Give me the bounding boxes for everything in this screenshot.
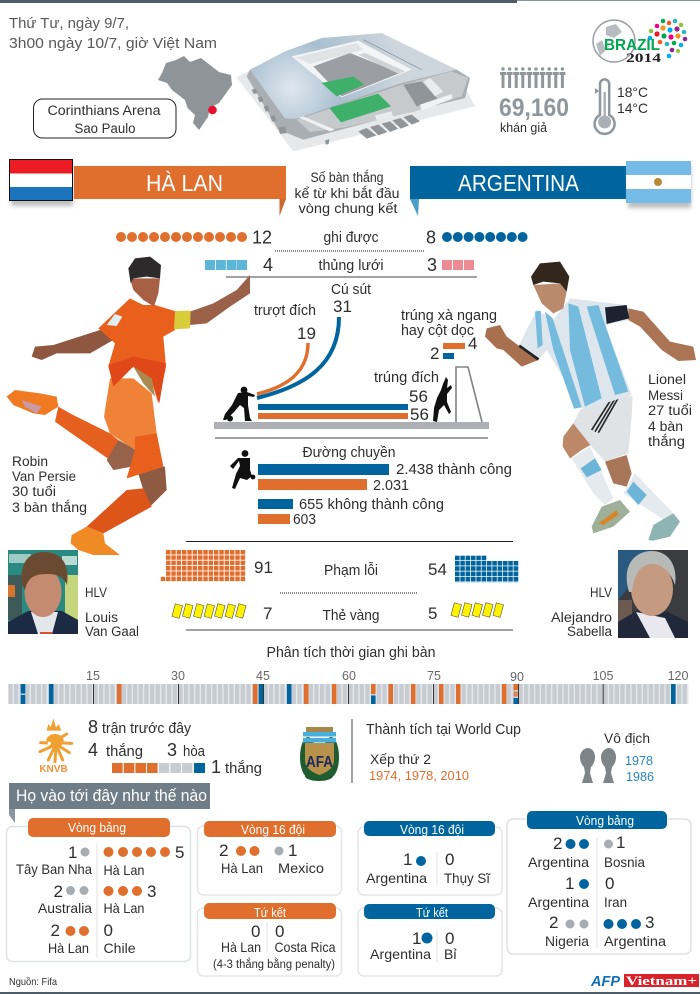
on-target bars: trúng đích	[374, 370, 439, 386]
section banner: road to the semi-final	[9, 783, 210, 823]
flag: Netherlands	[9, 159, 73, 206]
match date and time	[9, 15, 217, 52]
minute labels: 105	[593, 669, 613, 683]
spectator count: 69,160	[499, 94, 569, 122]
woodwork stat: 4	[468, 334, 477, 353]
player caption: Van Persie: Van Persie	[12, 469, 76, 484]
match: Argentina vs Iran: Argentina	[528, 894, 589, 910]
match: Netherlands vs Chile: 2	[50, 921, 60, 940]
logo: AFA shield: AFA	[306, 754, 333, 771]
flag: Argentina	[626, 161, 691, 208]
champions block: 1978	[625, 754, 653, 768]
marker gap	[21, 694, 25, 695]
coach caption: Van Gaal: Louis	[85, 610, 118, 625]
goals conceded row	[205, 255, 474, 275]
stadium illustration	[237, 33, 475, 151]
spectator count: khán giả	[500, 120, 548, 135]
goal timing chart	[8, 645, 688, 704]
player: Lionel Messi	[485, 262, 696, 541]
previous meetings record: 3	[167, 740, 177, 760]
ground strip	[214, 422, 489, 429]
player caption: Van Persie: Robin	[12, 454, 48, 469]
match: Argentina vs Iran: 1	[565, 874, 574, 893]
player caption: Messi: Lionel	[648, 372, 686, 387]
heading: goals since finals began: vòng chung kết	[298, 201, 398, 216]
passes chart: 2.031	[373, 478, 409, 494]
yellow cards row: 7	[263, 604, 272, 623]
player caption: Messi: 4 bàn	[648, 419, 683, 434]
match: Australia vs Netherlands	[38, 882, 156, 916]
logo: AFP Vietnam+: Vietnam+	[626, 974, 697, 988]
shots heading: trượt đích	[254, 303, 316, 319]
player caption: Messi	[648, 372, 692, 449]
match: Argentina vs Bosnia: 1	[616, 833, 625, 852]
match: Argentina vs Bosnia: Bosnia	[604, 854, 645, 870]
panel: Netherlands group stage: Vòng bảng	[68, 821, 126, 835]
match: Nigeria vs Argentina	[545, 913, 666, 949]
divider line	[186, 540, 513, 542]
match: Australia vs Netherlands: 2	[54, 882, 63, 901]
World Cup record: Xếp thứ 2	[370, 751, 431, 767]
match: Argentina vs Iran	[528, 874, 627, 910]
goals scored row: 8	[426, 228, 436, 248]
passes chart: Đường chuyền	[302, 445, 396, 461]
match: Nigeria vs Argentina: 2	[549, 913, 558, 932]
minute labels: 45	[256, 669, 270, 683]
logo: Brazil 2014: 2014	[626, 50, 662, 65]
yellow cards: Argentina	[451, 603, 504, 617]
panel: Netherlands quarter-final: 0	[251, 922, 260, 941]
coach caption: Sabella: Alejandro	[551, 610, 612, 625]
coach caption: Sabella: HLV	[590, 585, 612, 600]
passes chart: 655 không thành công	[299, 497, 444, 513]
shots heading: Cú sút	[331, 282, 371, 298]
match: Argentina vs Bosnia: 2	[553, 834, 562, 853]
panel: Argentina quarter-final: Argentina	[370, 946, 431, 962]
minute labels: 15	[86, 669, 100, 683]
panel: Argentina round of 16: 0	[445, 850, 454, 869]
logo: Brazil 2014	[593, 19, 687, 65]
temperature labels: 14°C	[617, 100, 648, 116]
divider line	[186, 629, 513, 631]
panel: Netherlands round of 16: 1	[288, 841, 297, 860]
Netherlands goal markers	[117, 684, 518, 704]
coach caption: Van Gaal	[85, 585, 139, 639]
logo: AFP Vietnam+	[590, 973, 699, 990]
yellow cards row	[172, 603, 504, 624]
coach caption: Van Gaal: Van Gaal	[85, 624, 139, 639]
previous meetings record: 4	[88, 740, 98, 760]
on-target bars: 56	[410, 405, 429, 424]
match: Nigeria vs Argentina: Nigeria	[545, 933, 589, 949]
shots heading: 31	[333, 297, 352, 316]
dotted divider	[280, 592, 418, 594]
coach caption: Van Gaal: HLV	[85, 585, 107, 600]
player caption: Van Persie: 3 bàn thắng	[12, 500, 87, 515]
previous meetings record: 1	[211, 757, 221, 777]
match: Argentina vs Iran: Iran	[604, 894, 627, 910]
temperature labels	[617, 84, 648, 116]
coach photo: Alejandro Sabella	[618, 550, 688, 638]
temperature labels: 18°C	[617, 84, 648, 100]
player caption: Van Persie: 30 tuổi	[12, 484, 56, 499]
Argentina goal markers	[21, 684, 676, 704]
goals conceded row: 4	[263, 255, 273, 275]
heading: goals since finals began: kể từ khi bắt đầu	[294, 186, 400, 201]
source note: Nguồn: Fifa	[9, 976, 57, 988]
panel: Netherlands round of 16: Mexico	[278, 860, 324, 876]
banner: Argentina: ARGENTINA	[458, 170, 580, 196]
panel: Argentina quarter-final: Bỉ	[444, 946, 457, 962]
match: Netherlands vs Chile: Chile	[104, 940, 136, 956]
icon: goal frame	[456, 367, 482, 422]
quarter-hour ticks	[93, 684, 604, 704]
panel: Argentina quarter-final: 0	[445, 929, 454, 948]
bottom bar	[0, 992, 700, 994]
spectator count	[499, 94, 569, 135]
panel: Netherlands quarter-final: Hà Lan	[221, 939, 261, 955]
logo: KNVB: KNVB	[39, 764, 68, 775]
minute strip	[8, 684, 688, 704]
player: Robin Van Persie	[7, 257, 250, 555]
World Cup record: Thành tích tại World Cup	[366, 722, 521, 738]
panel: Argentina quarter-final: 1	[412, 929, 421, 948]
panel: Argentina round of 16: Vòng 16 đội	[400, 823, 464, 837]
passes chart: 2.438 thành công	[396, 462, 512, 478]
icon: Brazil map	[158, 56, 232, 130]
match: Argentina vs Bosnia: Argentina	[528, 854, 589, 870]
coach photo: Louis Van Gaal	[8, 550, 78, 634]
heading: goals since finals began: Số bàn thắng	[310, 170, 384, 185]
passes chart	[230, 445, 512, 528]
previous meetings record: thắng	[106, 743, 143, 760]
fouls grid: Netherlands	[161, 550, 246, 582]
panel: Argentina quarter-final	[358, 904, 502, 976]
panel: Netherlands round of 16: Hà Lan	[221, 860, 263, 876]
match: Netherlands vs Chile: 0	[104, 921, 113, 940]
match: Argentina vs Bosnia	[528, 833, 645, 870]
divider line	[226, 276, 477, 278]
woodwork stat: trúng xà ngang	[401, 308, 497, 324]
panel: Netherlands quarter-final: Tứ kết	[254, 906, 286, 920]
champions block	[580, 730, 654, 784]
woodwork stat: 2	[430, 344, 439, 363]
goals scored row	[116, 228, 528, 248]
fouls row: 54	[428, 560, 447, 579]
fouls row: Phạm lỗi	[324, 562, 378, 579]
goals scored row: ghi được	[324, 230, 378, 246]
previous meetings record	[88, 717, 262, 777]
goals conceded row: thủng lưới	[318, 258, 384, 274]
panel: Netherlands round of 16: 2	[219, 841, 228, 860]
logo: Brazil 2014: BRAZIL	[604, 37, 660, 54]
shot curves	[257, 317, 339, 398]
minute labels: 60	[342, 669, 356, 683]
goals scored row: 12	[252, 228, 272, 248]
minute labels: 120	[668, 669, 688, 683]
venue label: Sao Paulo	[74, 121, 136, 136]
banner: Argentina	[410, 166, 627, 216]
panel: Argentina group stage: Vòng bảng	[576, 814, 634, 828]
player caption: Messi: Messi	[648, 388, 683, 403]
panel: Netherlands quarter-final: 0	[275, 922, 284, 941]
icon: spectators row	[500, 67, 565, 88]
yellow cards: Netherlands	[172, 604, 246, 618]
previous meetings record: 8	[88, 717, 98, 737]
record squares	[112, 763, 205, 773]
panel: Argentina round of 16: 1	[403, 850, 412, 869]
icon: trophies	[580, 748, 616, 783]
on-target bars	[258, 370, 439, 424]
venue label	[34, 99, 176, 138]
banner: Netherlands	[74, 166, 286, 216]
player caption: Messi: 27 tuổi	[648, 403, 692, 418]
match: Netherlands vs Chile: Hà Lan	[48, 940, 89, 956]
match: Australia vs Netherlands: Hà Lan	[104, 900, 144, 916]
minute labels: 75	[427, 669, 441, 683]
minute labels: 90	[510, 670, 524, 684]
fouls row	[161, 550, 519, 582]
shots heading: 19	[297, 324, 316, 343]
venue label: Corinthians Arena	[48, 103, 161, 118]
match: Spain vs Netherlands: 1	[68, 843, 77, 862]
panel: Netherlands round of 16	[198, 821, 342, 895]
fouls grid: Argentina	[455, 556, 519, 582]
shots chart	[214, 282, 497, 429]
World Cup record	[366, 722, 521, 783]
panel: Netherlands group stage	[6, 818, 190, 962]
match: Spain vs Netherlands	[16, 843, 184, 878]
panel: Argentina round of 16	[358, 821, 502, 895]
panel: Netherlands quarter-final: (4-3 thắng bằng penalty)	[213, 958, 335, 971]
divider line	[215, 437, 488, 439]
goals conceded row: 3	[427, 255, 437, 275]
match: Australia vs Netherlands: 3	[147, 882, 156, 901]
icon: goalkeeper silhouette	[433, 377, 452, 422]
fouls row: 91	[254, 558, 273, 577]
icon: runner silhouette	[230, 450, 255, 489]
chart heading: Phân tích thời gian ghi bàn	[266, 645, 436, 661]
match: Argentina vs Iran: 0	[605, 874, 614, 893]
coach caption: Sabella	[551, 585, 612, 639]
match date and time: 3h00 ngày 10/7, giờ Việt Nam	[9, 35, 217, 52]
match: Netherlands vs Chile	[48, 921, 136, 956]
woodwork stat: hay cột dọc	[401, 323, 474, 339]
section banner: road to the semi-final: Họ vào tới đây như thế nào	[16, 787, 207, 805]
match: Spain vs Netherlands: Tây Ban Nha	[16, 861, 92, 877]
passes chart: 603	[293, 512, 316, 528]
panel: Netherlands quarter-final	[198, 903, 342, 976]
top bar	[0, 0, 700, 3]
icon: kicker silhouette	[223, 387, 255, 422]
banner: Netherlands: HÀ LAN	[146, 170, 223, 196]
champions block: 1986	[626, 770, 654, 784]
panel: Netherlands round of 16: Vòng 16 đội	[241, 823, 305, 837]
woodwork stat	[401, 308, 497, 363]
yellow cards row: Thẻ vàng	[322, 608, 380, 624]
previous meetings record: thắng	[225, 760, 262, 777]
minute labels	[86, 669, 688, 684]
previous meetings record: trận trước đây	[102, 721, 192, 737]
panel: Argentina round of 16: Argentina	[366, 870, 427, 886]
coach caption: Sabella: Sabella	[567, 624, 612, 639]
logo: AFP Vietnam+: AFP	[590, 973, 621, 990]
dotted divider	[275, 250, 424, 252]
previous meetings record: hòa	[183, 744, 206, 760]
match: Nigeria vs Argentina: Argentina	[604, 933, 666, 949]
icon: thermometer	[595, 79, 615, 134]
vertical divider	[351, 719, 353, 783]
panel: Argentina group stage	[507, 811, 691, 954]
match: Australia vs Netherlands: Australia	[38, 900, 92, 916]
match: Spain vs Netherlands: Hà Lan	[104, 862, 144, 878]
match: Spain vs Netherlands: 5	[175, 843, 184, 862]
on-target bars: 56	[409, 387, 428, 406]
World Cup record: 1974, 1978, 2010	[369, 768, 469, 783]
panel: Argentina round of 16: Thụy Sĩ	[444, 870, 491, 886]
yellow cards row: 5	[428, 604, 437, 623]
shots heading	[254, 282, 371, 343]
logo: AFA shield	[300, 727, 339, 781]
match date and time: Thứ Tư, ngày 9/7,	[9, 15, 129, 32]
panel: Netherlands quarter-final: Costa Rica	[274, 939, 336, 955]
player caption: Van Persie	[12, 454, 87, 515]
minute labels: 30	[171, 669, 185, 683]
match: Nigeria vs Argentina: 3	[645, 913, 654, 932]
heading: goals since finals began	[294, 170, 400, 216]
player caption: Messi: thắng	[648, 434, 685, 449]
champions block: Vô địch	[604, 730, 650, 746]
logo: KNVB	[39, 719, 72, 775]
panel: Argentina quarter-final: Tứ kết	[416, 906, 448, 920]
